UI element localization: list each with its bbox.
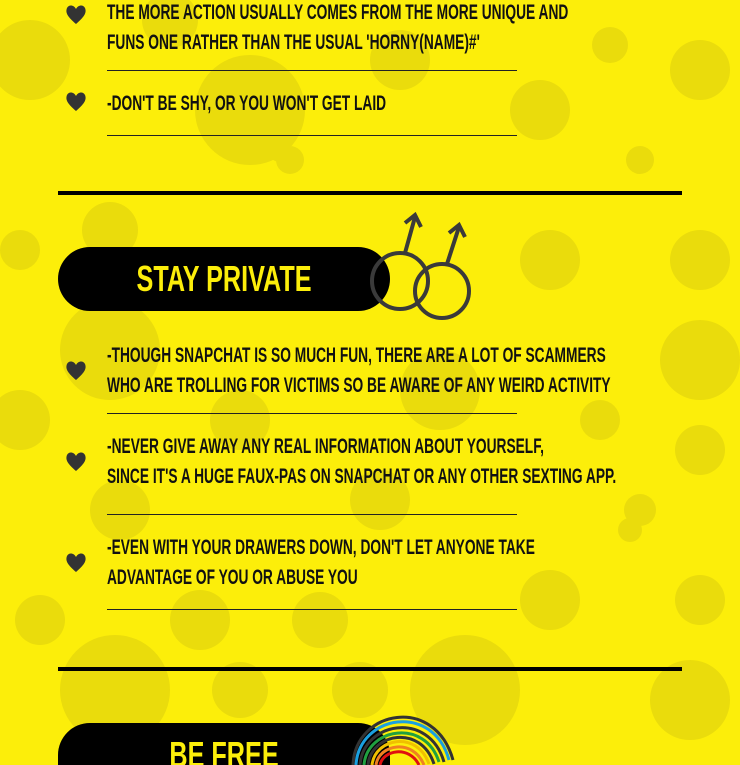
text: item 5: ADVANTAGE OF YOU OR ABUSE YOU	[107, 566, 358, 589]
text: item 4	[107, 435, 616, 488]
heart icon 4	[66, 452, 86, 471]
heart icon 1	[66, 6, 86, 24]
text: item 1: THE MORE ACTION USUALLY COMES FROM THE MORE UNIQUE AND	[107, 1, 568, 24]
icon: male symbols	[370, 212, 471, 320]
icon: rainbow	[352, 716, 454, 765]
text: item 3	[107, 344, 611, 397]
text: item 4: SINCE IT'S A HUGE FAUX-PAS ON SNAPCHAT OR ANY OTHER SEXTING APP.	[107, 465, 616, 488]
text: item 5	[107, 536, 535, 589]
text: item 3: WHO ARE TROLLING FOR VICTIMS SO BE AWARE OF ANY WEIRD ACTIVITY	[107, 374, 611, 397]
heart icon 2	[66, 92, 86, 111]
text: item 2: -DON'T BE SHY, OR YOU WON'T GET LAID	[107, 92, 386, 115]
heading: stay private: STAY PRIVATE	[136, 258, 312, 299]
text: item 1	[107, 1, 568, 54]
heading: be free	[58, 723, 390, 765]
text: item 3: -THOUGH SNAPCHAT IS SO MUCH FUN, THERE ARE A LOT OF SCAMMERS	[107, 344, 606, 367]
text: item 5: -EVEN WITH YOUR DRAWERS DOWN, DON'T LET ANYONE TAKE	[107, 536, 535, 559]
heading: stay private	[58, 247, 390, 311]
heart icon 3	[66, 362, 86, 380]
text: item 4: -NEVER GIVE AWAY ANY REAL INFORMATION ABOUT YOURSELF,	[107, 435, 544, 458]
text: item 1: FUNS ONE RATHER THAN THE USUAL 'HORNY(NAME)#'	[107, 31, 480, 54]
heart icon 5	[66, 554, 86, 572]
